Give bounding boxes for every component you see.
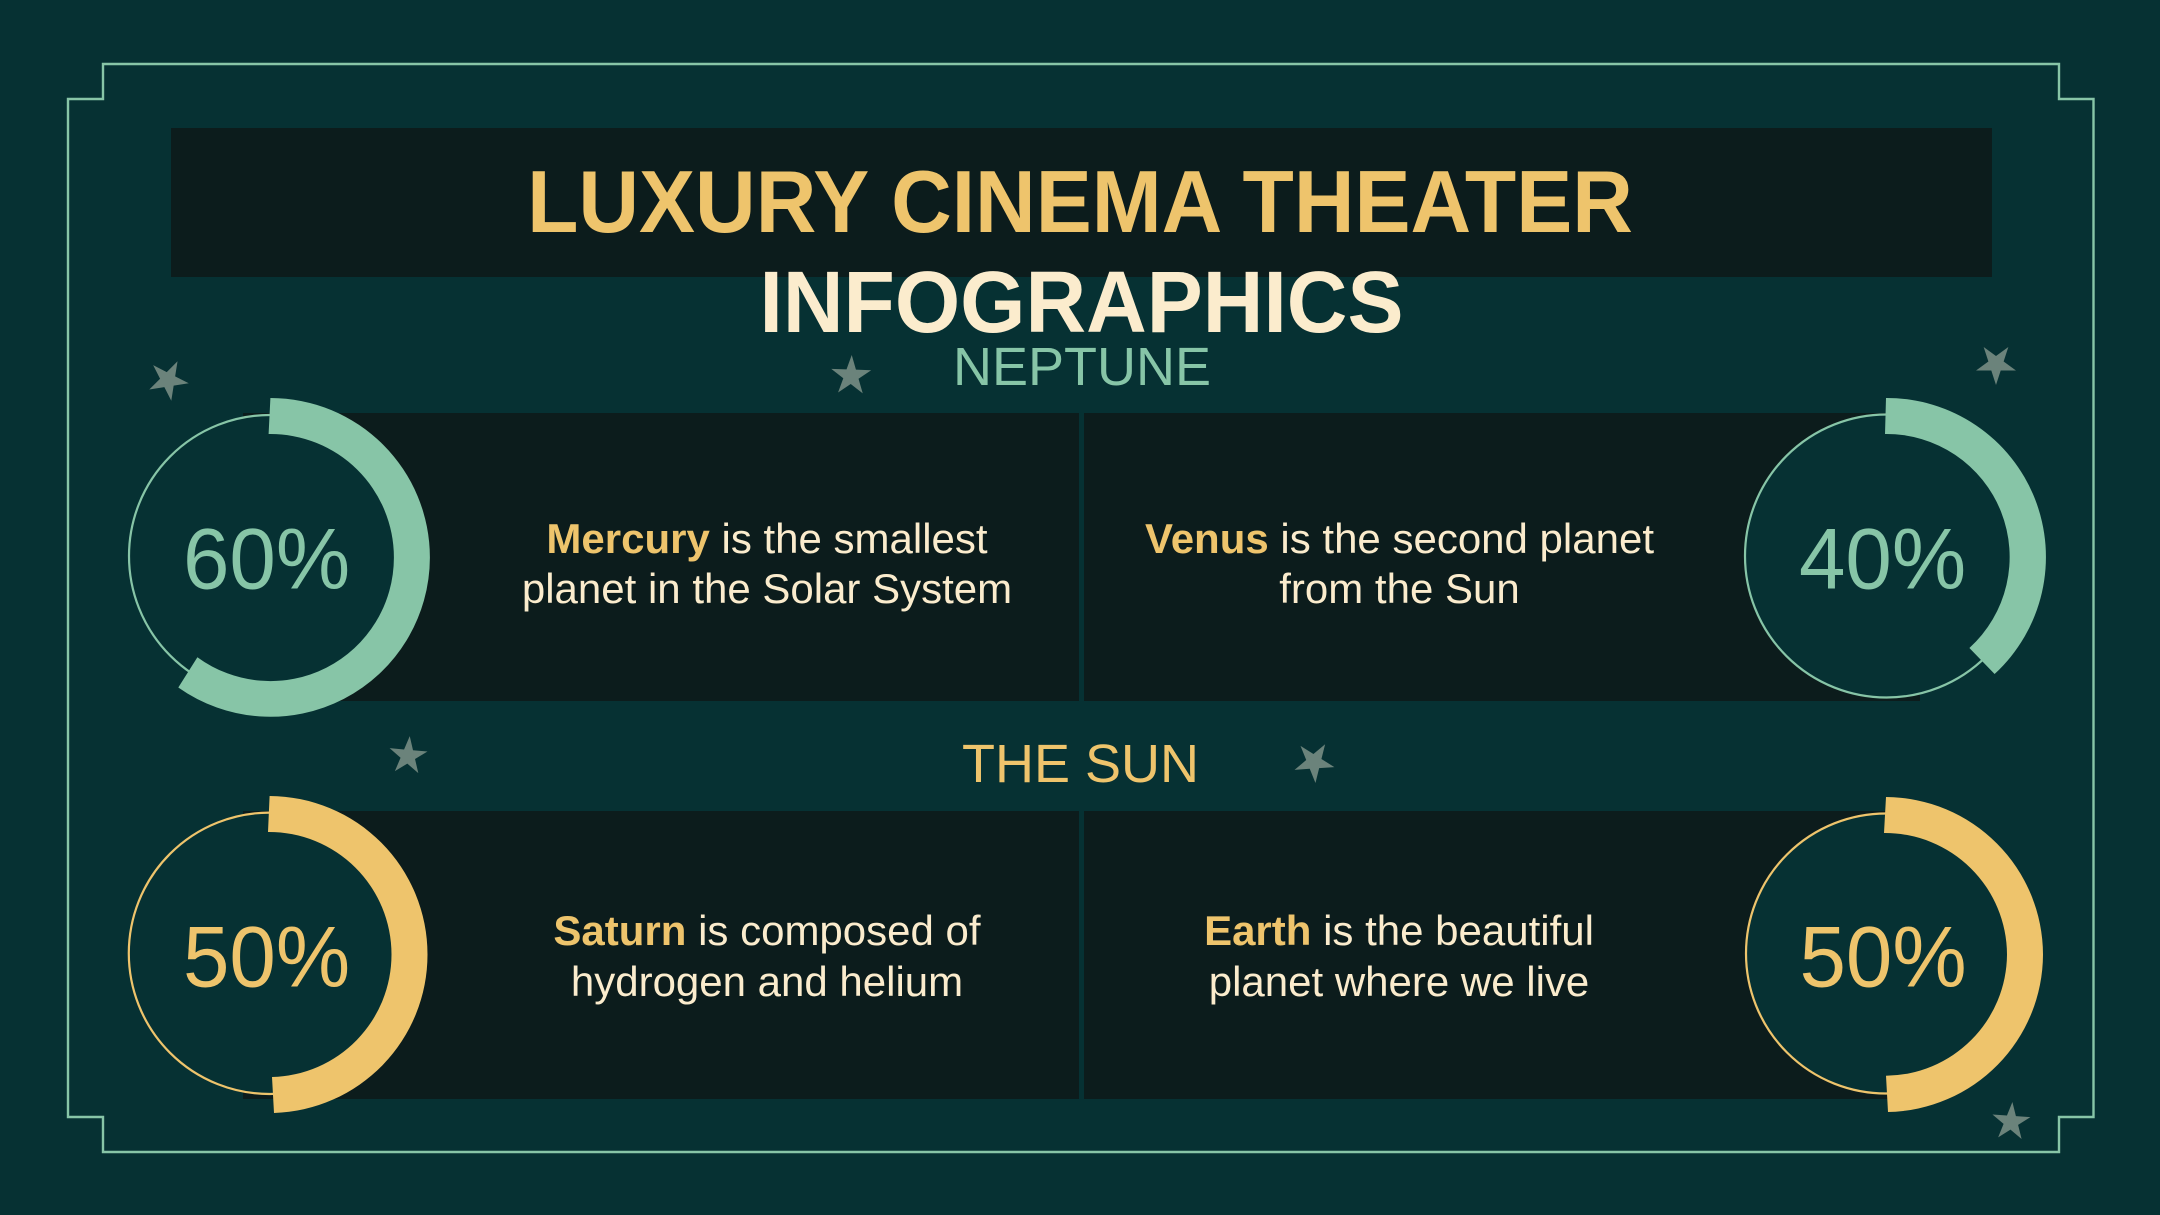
- panel: Neptune row: [243, 413, 1920, 701]
- text: Mercury: Mercury is the smallest: [546, 515, 988, 562]
- text: Earth: planet where we live: [1209, 958, 1589, 1005]
- title: [527, 153, 1633, 351]
- title: INFOGRAPHICS: [760, 254, 1403, 351]
- heading: The Sun: THE SUN: [962, 734, 1199, 794]
- donut chart: 50% Earth: 50%: [1799, 908, 1967, 1005]
- icon: star near Neptune: [830, 354, 872, 394]
- heading: Neptune: NEPTUNE: [953, 337, 1211, 397]
- donut chart: 60% Mercury: [129, 398, 430, 717]
- donut chart: 50% Saturn: 50%: [183, 908, 350, 1005]
- donut chart: 50% Earth: [1746, 797, 2043, 1112]
- icon: star top left: [146, 360, 191, 404]
- text: Saturn: hydrogen and helium: [571, 958, 963, 1005]
- icon: star middle left: [388, 734, 429, 774]
- donut chart: 40% Venus: [1745, 398, 2046, 698]
- donut chart: 40% Venus: 40%: [1799, 510, 1966, 607]
- text: Venus: from the Sun: [1279, 565, 1520, 612]
- donut chart: 60% Mercury: 60%: [183, 510, 350, 607]
- text: Mercury: planet in the Solar System: [522, 565, 1012, 612]
- title: LUXURY CINEMA THEATER: [527, 153, 1633, 251]
- donut chart: 50% Saturn: [129, 796, 428, 1113]
- icon: star near The Sun: [1293, 744, 1335, 784]
- text: Venus: Venus is the second planet: [1145, 515, 1654, 562]
- icon: star top right: [1976, 347, 2016, 385]
- title banner: [171, 128, 1992, 277]
- icon: star bottom right: [1991, 1101, 2031, 1139]
- panel: The Sun row: [243, 811, 1893, 1099]
- text: Saturn: Saturn is composed of: [553, 907, 981, 954]
- text: Earth: Earth is the beautiful: [1204, 907, 1594, 954]
